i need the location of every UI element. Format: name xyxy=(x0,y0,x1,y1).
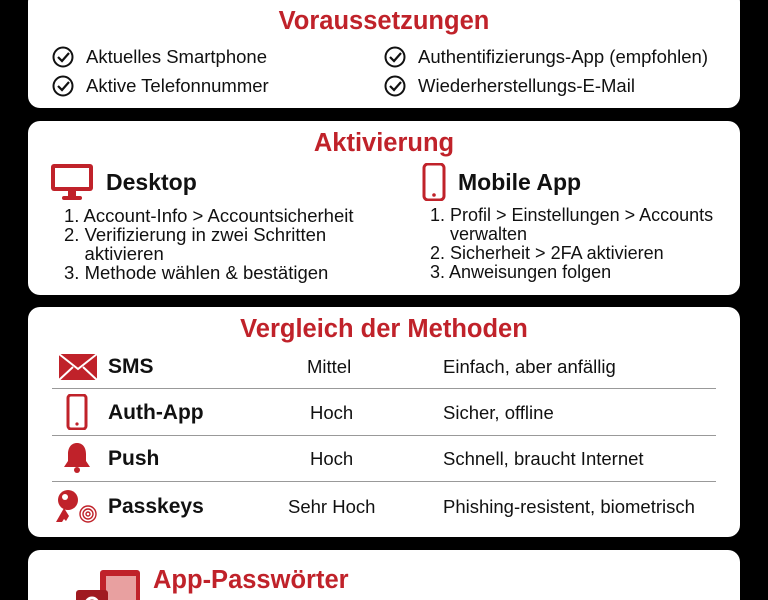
item: Authentifizierungs-App: Authentifizierungs-App (empfohlen) xyxy=(418,46,708,67)
panel: Vergleich der Methoden xyxy=(28,307,740,537)
steps: Desktop: 3. Methode wählen & bestätigen xyxy=(64,262,328,283)
panel: Aktivierung xyxy=(28,121,740,295)
heading: Voraussetzungen: Voraussetzungen xyxy=(279,7,489,35)
icon: app windows xyxy=(76,570,140,600)
steps: Mobile: 2. Sicherheit > 2FA aktivieren xyxy=(430,243,664,263)
icon: mobile xyxy=(422,163,446,201)
steps: Mobile: 3. Anweisungen folgen xyxy=(430,262,611,282)
steps: Desktop: aktivieren xyxy=(85,243,164,264)
row: Passkeys xyxy=(56,490,695,523)
steps: Desktop xyxy=(64,205,354,283)
steps: Desktop: 1. Account-Info > Accountsicherheit xyxy=(64,205,354,226)
row: Push xyxy=(64,443,644,473)
panel: App-Passwörter xyxy=(28,550,740,600)
row: SMS xyxy=(59,354,616,380)
steps: Desktop: 2. Verifizierung in zwei Schritten xyxy=(64,224,326,245)
row: Auth-App: Auth-App xyxy=(108,401,204,424)
panel: Voraussetzungen xyxy=(28,0,740,108)
icon: envelope xyxy=(59,354,97,380)
row: SMS: Einfach, aber anfällig xyxy=(443,356,616,377)
heading: Aktivierung: Aktivierung xyxy=(314,129,454,157)
row: SMS: SMS xyxy=(108,355,154,378)
row: Push: Schnell, braucht Internet xyxy=(443,448,644,469)
icon: desktop xyxy=(51,164,93,200)
heading: Mobile App: Mobile App xyxy=(458,169,581,195)
steps: Mobile xyxy=(430,205,713,282)
item: Wiederherstellungs-E-Mail: Wiederherstellungs-E-Mail xyxy=(418,75,635,96)
heading: Desktop: Desktop xyxy=(106,169,197,195)
item: Aktive Telefonnummer: Aktive Telefonnummer xyxy=(86,75,269,96)
row: Auth-App: Sicher, offline xyxy=(443,402,554,423)
row: Passkeys: Passkeys xyxy=(108,495,204,518)
row: SMS: Mittel xyxy=(307,356,351,377)
row: Passkeys: Phishing-resistent, biometrisch xyxy=(443,496,695,517)
item: Aktuelles Smartphone: Aktuelles Smartphone xyxy=(86,46,267,67)
row: Auth-App xyxy=(66,394,554,430)
icon: bell xyxy=(64,443,90,473)
steps: Mobile: 1. Profil > Einstellungen > Accounts xyxy=(430,205,713,225)
icon: key fingerprint xyxy=(56,490,97,523)
heading: Vergleich: Vergleich der Methoden xyxy=(240,315,528,343)
steps: Mobile: verwalten xyxy=(450,224,527,244)
heading: App-Passwörter: App-Passwörter xyxy=(153,566,349,594)
row: Auth-App: Hoch xyxy=(310,402,353,423)
icon: phone xyxy=(66,394,88,430)
row: Push: Hoch xyxy=(310,448,353,469)
row: Passkeys: Sehr Hoch xyxy=(288,496,375,517)
row: Push: Push xyxy=(108,447,159,470)
